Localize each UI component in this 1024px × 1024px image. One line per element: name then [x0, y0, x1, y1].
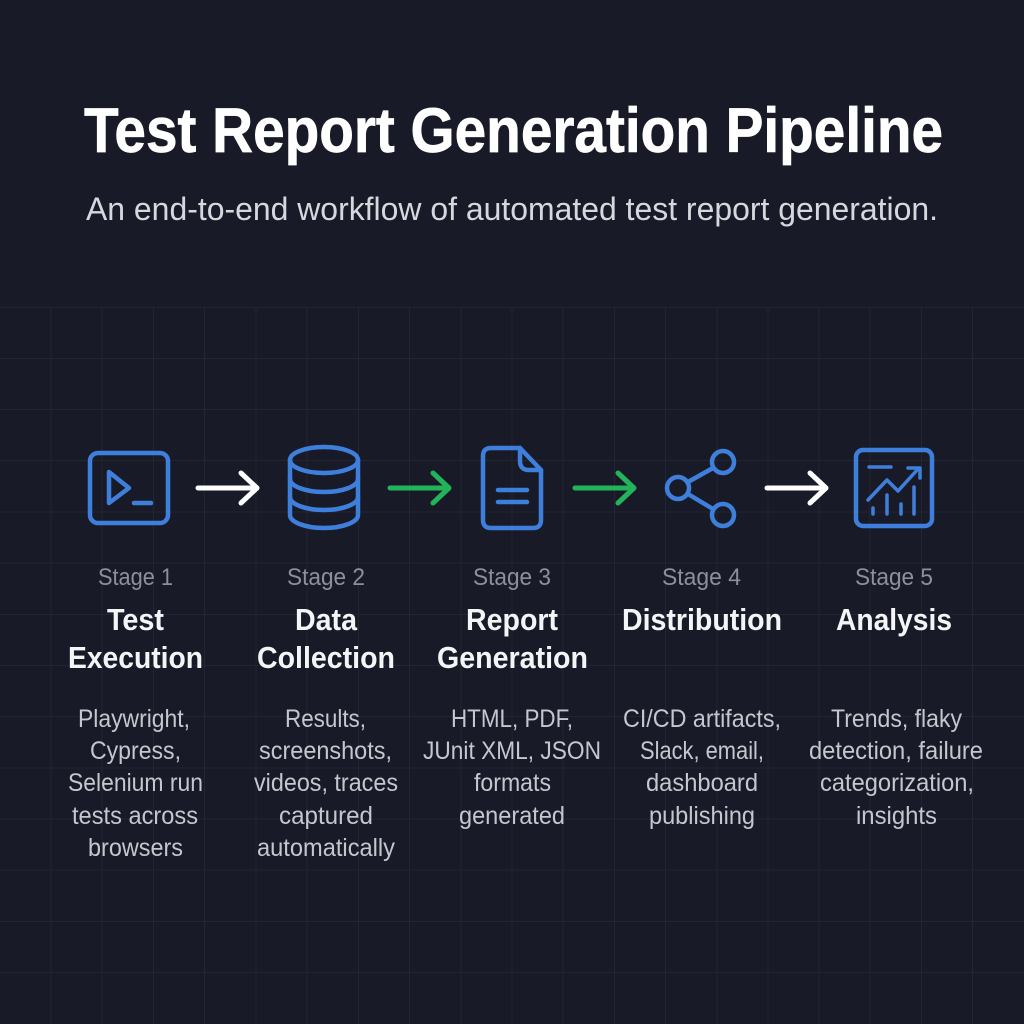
stage 1 description: Playwright,	[78, 705, 190, 733]
stage 2 heading	[257, 602, 395, 675]
stage 1 description: Selenium run	[68, 769, 203, 797]
stage 2 description: automatically	[257, 834, 395, 862]
icon: document	[483, 448, 541, 528]
stage 2 description: screenshots,	[259, 737, 392, 765]
arrow: stage 2 to stage 3	[390, 473, 449, 503]
subtitle: An end-to-end workflow of automated test report generation.	[86, 191, 938, 227]
stage 5 description: categorization,	[820, 769, 974, 797]
stage 2 label: Stage 2	[287, 564, 365, 591]
stage 5 label: Stage 5	[855, 564, 933, 591]
stage 5 description: detection, failure	[809, 737, 983, 765]
stage 2 column	[254, 564, 398, 862]
stage 1 heading	[68, 602, 203, 675]
stage 3 heading: Report	[466, 602, 558, 637]
stage 3 heading	[437, 602, 588, 675]
icon: analytics chart	[856, 450, 932, 526]
arrow: stage 3 to stage 4	[575, 473, 634, 503]
stage 1 description: Cypress,	[90, 737, 181, 765]
stage 3 label: Stage 3	[473, 564, 551, 591]
stage 3 description: JUnit XML, JSON	[423, 737, 601, 765]
stage 3 heading: Generation	[437, 640, 588, 675]
stage 3 description	[423, 705, 601, 830]
stage 5 description: insights	[856, 802, 937, 830]
stage 4 description: dashboard	[646, 769, 758, 797]
stage 2 description: Results,	[285, 705, 366, 733]
stage 3 description: HTML, PDF,	[451, 705, 573, 733]
icon: share	[667, 451, 734, 526]
stage 5 description: Trends, flaky	[831, 705, 962, 733]
stage 4 description: publishing	[649, 802, 755, 830]
stage 1 description: tests across	[72, 802, 198, 830]
stage 4 description: Slack, email,	[640, 737, 764, 765]
arrow: stage 1 to stage 2	[198, 473, 257, 503]
icon: terminal	[90, 453, 168, 523]
stage 4 column	[622, 564, 782, 830]
stage 4 description: CI/CD artifacts,	[623, 705, 781, 733]
stage 1 description	[68, 705, 203, 862]
stage 2 heading: Collection	[257, 640, 395, 675]
stage 2 heading: Data	[295, 602, 358, 637]
stage 1 heading: Test	[107, 602, 164, 637]
stage 5 description	[809, 705, 983, 830]
stage 3 column	[423, 564, 601, 830]
arrow: stage 4 to stage 5	[767, 473, 826, 503]
stage 4 label: Stage 4	[662, 564, 741, 591]
title: Test Report Generation Pipeline	[84, 96, 943, 166]
stage 2 description	[254, 705, 398, 862]
stage 5 heading: Analysis	[836, 602, 952, 637]
icon: database	[290, 447, 358, 528]
stage 1 description: browsers	[88, 834, 183, 862]
stage 4 description	[623, 705, 781, 830]
stage 2 description: captured	[279, 802, 373, 830]
stage 1 label: Stage 1	[98, 564, 173, 591]
stage 1 heading: Execution	[68, 640, 203, 675]
stage 3 description: generated	[459, 802, 565, 830]
stage 5 column	[809, 564, 983, 830]
stage 4 heading: Distribution	[622, 602, 782, 637]
stage 1 column	[68, 564, 203, 862]
stage 3 description: formats	[474, 769, 551, 797]
stage 2 description: videos, traces	[254, 769, 398, 797]
